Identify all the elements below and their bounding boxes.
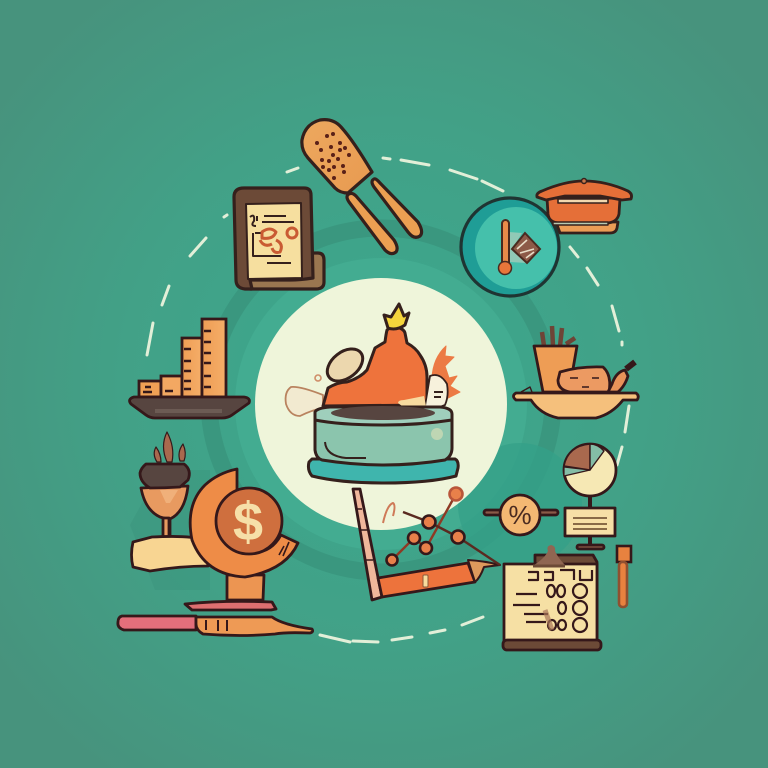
icon: ruler bar chart <box>130 319 249 418</box>
icon: pencil line chart <box>353 488 500 600</box>
coin <box>216 488 282 554</box>
dollar sign: $ <box>233 492 263 552</box>
plate behind chicken <box>321 342 369 388</box>
drumstick bone <box>286 387 323 416</box>
main illustration: chicken in pot <box>286 304 460 483</box>
tail feathers <box>432 346 460 398</box>
pot base <box>308 459 458 483</box>
goblet flames <box>154 432 185 462</box>
pot rim <box>315 407 452 425</box>
percent sign: % <box>508 500 532 530</box>
stand <box>227 575 264 600</box>
icon: wok with food <box>514 326 638 418</box>
chicken head <box>425 375 448 408</box>
icon: money and goblet <box>118 432 313 636</box>
crown <box>384 304 409 329</box>
pot body <box>315 420 452 465</box>
coin ring <box>190 469 298 577</box>
icon: thermometer badge <box>461 198 559 296</box>
icon: percent badge <box>484 495 558 535</box>
lower pens <box>185 601 276 610</box>
chicken body <box>323 327 427 406</box>
goblet <box>141 486 188 537</box>
icon: clipboard checklist <box>503 545 601 650</box>
icon: cooking pot <box>537 178 632 233</box>
dashed orbit <box>147 158 629 642</box>
icon: spatula <box>302 120 422 254</box>
background rings <box>130 228 582 590</box>
hand <box>132 536 208 571</box>
center circle <box>255 278 507 530</box>
icon: pie chart on sign <box>564 444 616 549</box>
icon: recipe tablet <box>234 188 324 289</box>
icon: spoon <box>617 546 631 607</box>
